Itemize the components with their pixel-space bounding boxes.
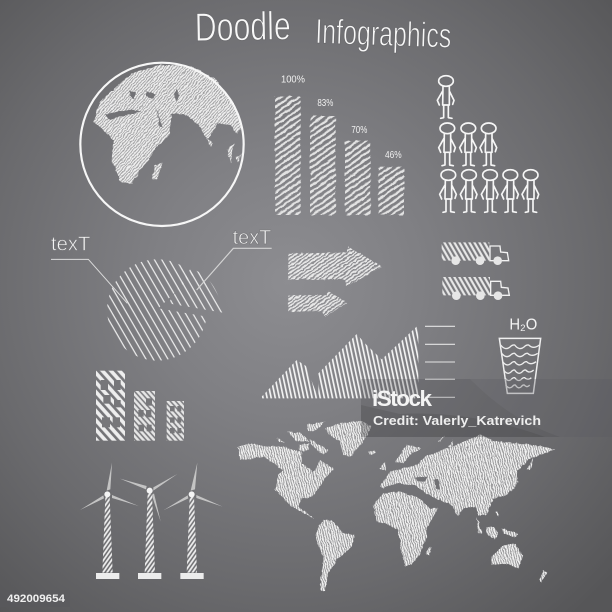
small building [167,401,184,441]
mountains [260,325,418,398]
mountain area chart [260,325,455,398]
H2O glass [499,316,541,393]
wind turbines [80,463,223,579]
turbine two [120,474,177,579]
greenland [325,421,372,457]
truck one [442,242,509,265]
title [194,4,452,56]
right label: texT [233,226,272,249]
left label: texT [51,233,91,256]
globe outline [80,63,244,226]
trucks [442,242,509,300]
turbine three [164,463,223,579]
pie main [107,259,207,361]
south america [316,519,355,592]
new zealand [539,570,547,582]
stock id [0,590,70,607]
watermark logo: iStock [372,386,432,411]
asian islands [438,435,533,539]
watermark credit: Credit: Valerly_Katrevich [373,414,541,428]
water waves [501,345,539,388]
world map [238,421,555,592]
canadian islands [277,422,328,455]
bar labels: 46% [385,150,402,161]
glass [499,338,541,393]
bar labels: 83% [317,98,333,109]
bars [275,96,404,215]
people pictogram [437,76,539,212]
pie slice [168,268,223,313]
truck two [442,277,509,300]
buildings [96,371,184,441]
bar labels [281,75,402,161]
eurasia [380,435,555,517]
globe continents [93,65,243,184]
iceland [368,451,375,454]
north america [238,443,334,519]
globe [80,63,244,226]
madagascar [426,547,432,556]
bar labels: 70% [351,125,367,136]
title: Infographics [315,12,452,56]
bar chart [275,75,404,215]
small arrow [288,291,347,317]
scandinavia and uk [379,445,422,471]
tall building [96,371,125,441]
bar labels: 100% [281,75,305,86]
watermark band [361,379,612,437]
large arrow [288,247,382,287]
right leader [197,248,272,290]
africa [373,492,438,566]
stock id: 492009654 [7,593,66,605]
arrows [288,247,382,317]
middle building [134,391,155,441]
title: Doodle [194,4,291,50]
H2O label: H₂O [509,316,537,333]
pie chart [51,226,272,361]
legend lines [425,326,455,397]
turbine one [80,463,139,579]
left leader [51,259,127,303]
australia [492,543,523,568]
